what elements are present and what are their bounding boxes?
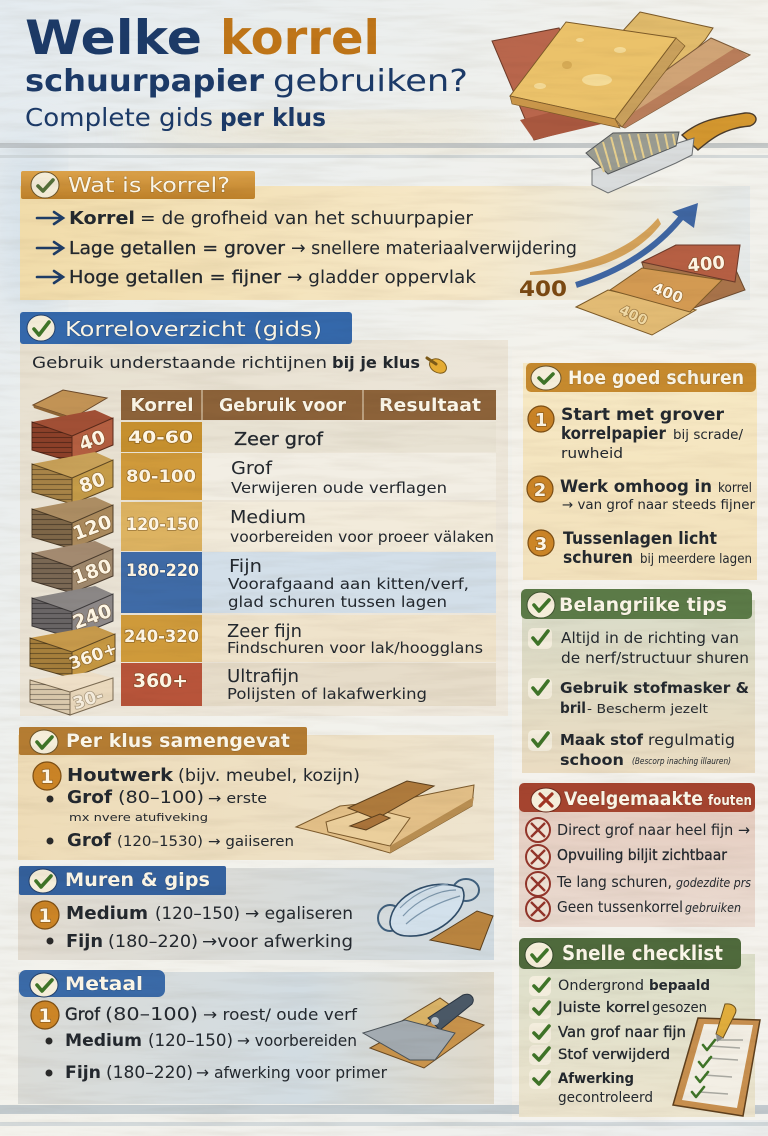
check 5: [529, 1069, 653, 1106]
row 360+: Polijsten of lakafwerking: [227, 685, 427, 703]
panel: muren en gips: [18, 866, 494, 960]
item: medium en fijn: (120–150): [155, 904, 240, 924]
icon: scraper on sandpaper: [363, 994, 484, 1068]
row 240-320: [121, 615, 496, 662]
panel: per klus samengevat: [18, 727, 494, 860]
definition lines: Hoge getallen = fijner: [69, 267, 282, 288]
row 180-220: Voorafgaand aan kitten/verf,: [228, 575, 469, 593]
heading: muren en gips: Muren & gips: [65, 869, 210, 891]
title: schuurpapier: [25, 64, 264, 99]
check 2: gesozen: [652, 1000, 707, 1016]
definition lines: → snellere materiaalverwijdering: [291, 238, 577, 259]
icon: pointing hand: [427, 356, 449, 376]
block 120: [32, 497, 115, 549]
intro text: [32, 353, 420, 372]
intro text: bij je klus: [332, 353, 420, 372]
heading: per klus samengevat: [19, 727, 307, 755]
item: medium en fijn: →voor afwerking: [202, 932, 353, 952]
icon: 400 grit sheets: 400: [617, 302, 650, 329]
item: grof, medium en fijn: (120–150): [148, 1031, 233, 1051]
item: grof, medium en fijn: [31, 1001, 387, 1083]
step 2: Werk omhoog in: [560, 477, 712, 497]
heading: belangrijke tips: [521, 589, 752, 619]
step 3: schuren: [563, 548, 633, 568]
row 120-150: 120-150: [126, 515, 199, 535]
item: medium en fijn: [31, 901, 353, 952]
item: grof, medium en fijn: (80–100): [105, 1004, 198, 1025]
definition lines: = de grofheid van het schuurpapier: [140, 208, 474, 229]
heading: veelgemaakte fouten: [519, 783, 755, 812]
heading: hoe goed schuren: Hoe goed schuren: [568, 367, 744, 389]
block 360+: 360+: [66, 639, 120, 674]
title: [25, 11, 468, 132]
block 180: 180: [70, 555, 115, 589]
tip 3: schoon: [560, 751, 624, 769]
item: grof, medium en fijn: Grof: [65, 1005, 101, 1025]
check 1: bepaald: [649, 978, 710, 994]
grit label 400: 400: [519, 277, 567, 301]
tip 3: regulmatig: [648, 731, 735, 749]
item: grof, medium en fijn: → roest/ oude verf: [203, 1005, 357, 1024]
mistake 3: [526, 872, 751, 896]
block 120: 120: [70, 511, 115, 545]
tip 2: Gebruik stofmasker &: [560, 679, 749, 697]
step 2: korrel: [718, 481, 752, 496]
row 40-60: 40-60: [128, 428, 193, 448]
item: houtwerk: (120–1530): [117, 834, 203, 850]
block 40: [32, 410, 113, 462]
item: grof, medium en fijn: → voorbereiden: [237, 1031, 357, 1050]
item: houtwerk: → gaiiseren: [208, 834, 294, 850]
mistake 1: [526, 818, 750, 842]
check 3: Van grof naar fijn: [558, 1023, 686, 1041]
step 3: Tussenlagen licht: [563, 529, 717, 549]
block 80: [32, 452, 113, 504]
table: grit overview: [121, 390, 496, 706]
tip 3: Maak stof: [560, 731, 643, 749]
heading: wat is korrel: Wat is korrel?: [68, 173, 230, 197]
mistake 1: Direct grof naar heel fijn →: [557, 821, 750, 839]
icon: 400 grit sheets: 400: [687, 252, 726, 277]
panel: metaal: [18, 970, 494, 1104]
tip 2: bril: [560, 699, 586, 717]
item: grof, medium en fijn: Medium: [65, 1031, 142, 1051]
icon: 400 grit sheets: [576, 245, 745, 335]
item: medium en fijn: Fijn: [66, 931, 103, 952]
row 360+: [121, 663, 496, 706]
grit arrows: [530, 203, 698, 285]
row 240-320: 240-320: [124, 627, 199, 647]
table header: Gebruik voor: [219, 395, 346, 416]
panel: korreloverzicht: [20, 312, 508, 716]
item: houtwerk: (bijv. meubel, kozijn): [178, 766, 360, 786]
row 180-220: [121, 552, 496, 613]
tip 3: (Bescorp inaching illauren): [632, 757, 731, 767]
heading: metaal: [19, 970, 165, 997]
row 120-150: Medium: [230, 507, 306, 528]
tip 2: - Bescherm jezelt: [587, 702, 708, 716]
panel: veelgemaakte fouten: [519, 783, 755, 927]
item: medium en fijn: (180–220): [108, 932, 198, 952]
mistake 2: [526, 845, 728, 869]
step 3: [528, 529, 752, 568]
row 120-150: [121, 502, 496, 551]
row 80-100: Verwijeren oude verflagen: [231, 479, 447, 497]
heading: veelgemaakte fouten: Veelgemaakte: [564, 788, 703, 810]
item: grof, medium en fijn: → afwerking voor primer: [196, 1063, 387, 1082]
icon: sanding brush: [586, 113, 756, 193]
heading: snelle checklist: Snelle checklist: [562, 941, 723, 965]
check 5: Afwerking: [558, 1071, 634, 1087]
title: gebruiken?: [273, 64, 468, 99]
row 180-220: 180-220: [126, 561, 199, 581]
mistake 4: Geen tussenkorrel: [557, 898, 683, 916]
intro text: Gebruik understaande richtijnen: [32, 353, 327, 372]
panel: belangrijke tips: [521, 589, 755, 773]
row 80-100: Grof: [231, 458, 273, 479]
row 180-220: Fijn: [229, 556, 262, 577]
tip 2: [528, 678, 749, 717]
table header: Korrel: [130, 395, 194, 416]
check 4: [529, 1045, 670, 1065]
row 360+: Ultrafijn: [227, 666, 299, 687]
row 120-150: voorbereiden voor proeer välaken: [230, 528, 494, 546]
step 2: → van grof naar steeds fijner: [562, 498, 756, 513]
heading: wat is korrel: [21, 171, 255, 199]
row 240-320: Findschuren voor lak/hoogglans: [227, 639, 483, 657]
step 1: korrelpapier: [561, 424, 667, 444]
definition lines: → gladder oppervlak: [287, 267, 477, 288]
heading: korreloverzicht: Korreloverzicht (gids): [65, 317, 322, 341]
item: medium en fijn: → egaliseren: [245, 904, 353, 924]
mistake 2: Opvuiling biljit zichtbaar: [557, 846, 728, 864]
check 2: Juiste korrel: [557, 1000, 650, 1016]
check 5: gecontroleerd: [558, 1090, 653, 1106]
heading: belangrijke tips: Belangriike tips: [559, 594, 727, 616]
mistake 3: godezdite prs: [676, 876, 751, 890]
heading: snelle checklist: [519, 938, 741, 969]
item: houtwerk: [33, 762, 360, 851]
mistake 4: [526, 897, 741, 921]
item: houtwerk: (80–100): [118, 788, 204, 808]
icon: 400 grit sheets: 400: [650, 279, 686, 307]
icon: wood with sandpaper: [296, 781, 474, 853]
icon: grit block stack: [30, 390, 120, 715]
check 2: [529, 999, 707, 1019]
item: houtwerk: Grof: [67, 830, 111, 851]
panel: snelle checklist: [519, 938, 760, 1117]
row 40-60: Zeer grof: [234, 429, 324, 450]
check 1: [529, 976, 710, 996]
check 4: Stof verwijderd: [558, 1047, 670, 1063]
row 180-220: glad schuren tussen lagen: [228, 593, 447, 611]
mistake 3: Te lang schuren,: [556, 873, 672, 891]
step 2: [527, 476, 756, 513]
tip 3: [528, 730, 735, 769]
item: houtwerk: Grof: [67, 787, 112, 808]
block 240: 240: [70, 600, 115, 634]
item: grof, medium en fijn: (180–220): [106, 1063, 193, 1083]
block 30-: [30, 672, 113, 715]
block 40: 40: [76, 426, 109, 456]
item: houtwerk: Houtwerk: [67, 765, 174, 786]
definition lines: [37, 208, 577, 288]
step 1: ruwheid: [561, 446, 623, 462]
heading: korreloverzicht: [20, 312, 352, 344]
step 1: Start met grover: [561, 405, 725, 425]
check 1: Ondergrond: [558, 978, 644, 994]
step 3: bij meerdere lagen: [640, 552, 752, 567]
table header: [121, 390, 496, 420]
title: per klus: [220, 103, 326, 132]
item: medium en fijn: 1: [38, 905, 52, 927]
block 360+: [30, 626, 120, 678]
row 80-100: [121, 453, 496, 500]
block 80: 80: [76, 468, 109, 498]
heading: hoe goed schuren: [526, 363, 756, 392]
heading: muren en gips: [19, 866, 226, 895]
row 360+: 360+: [133, 670, 188, 692]
item: grof, medium en fijn: Fijn: [65, 1063, 101, 1083]
definition lines: Korrel: [69, 208, 135, 229]
heading: veelgemaakte fouten: fouten: [708, 793, 752, 809]
table header: Resultaat: [379, 395, 481, 416]
icon: dust mask and sandpaper: [378, 879, 493, 950]
panel: wat is korrel: [20, 171, 750, 335]
title: Welke: [25, 11, 202, 66]
item: houtwerk: mx nvere atufiveking: [69, 811, 208, 824]
row 240-320: Zeer fijn: [227, 621, 302, 642]
block 240: [32, 586, 115, 638]
mistake 4: gebruiken: [685, 901, 741, 915]
block 30-: 30-: [71, 686, 106, 714]
step 3: 3: [535, 534, 547, 555]
tip 1: Altijd in de richting van: [561, 629, 739, 647]
step 1: bij scrade/: [673, 428, 744, 443]
row 40-60: [121, 422, 496, 452]
step 1: 1: [535, 410, 547, 431]
tip 1: [528, 628, 749, 667]
item: medium en fijn: Medium: [66, 903, 148, 924]
step 1: [528, 405, 744, 462]
item: houtwerk: → erste: [208, 791, 267, 807]
item: houtwerk: 1: [40, 766, 54, 788]
item: grof, medium en fijn: 1: [38, 1005, 52, 1027]
tip 1: de nerf/structuur shuren: [561, 649, 749, 667]
row 80-100: 80-100: [126, 467, 196, 487]
heading: per klus samengevat: Per klus samengevat: [66, 730, 290, 752]
icon: clipboard: [673, 1004, 760, 1116]
definition lines: Lage getallen = grover: [69, 238, 286, 259]
panel: hoe goed schuren: [523, 363, 757, 580]
title: Complete gids: [25, 103, 213, 132]
icon: sandpaper sheets: [492, 12, 750, 140]
step 2: 2: [534, 480, 546, 501]
title: korrel: [220, 11, 380, 66]
heading: metaal: Metaal: [65, 973, 143, 995]
block 180: [32, 541, 115, 593]
